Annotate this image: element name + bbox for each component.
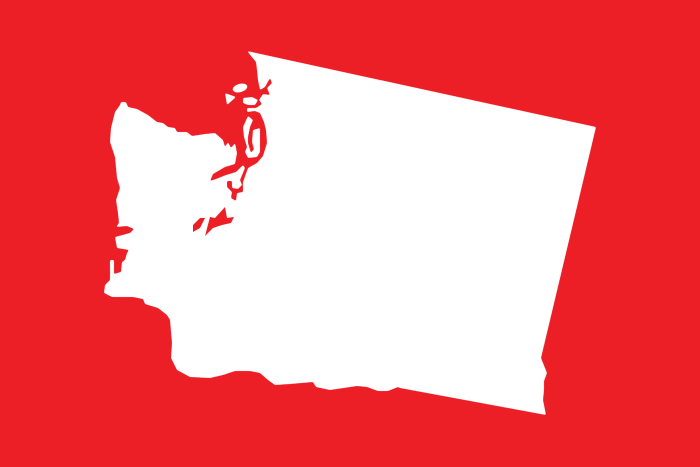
state shape with islands [104, 51, 596, 415]
island: Whidbey [243, 116, 260, 158]
inlet: southern sound small [193, 218, 205, 232]
inlet: southern sound large [205, 207, 234, 236]
state outline [104, 51, 596, 415]
island: Lopez triangle [225, 93, 236, 105]
island: San Juan ellipse [232, 82, 248, 94]
island: small north sound [243, 97, 258, 105]
